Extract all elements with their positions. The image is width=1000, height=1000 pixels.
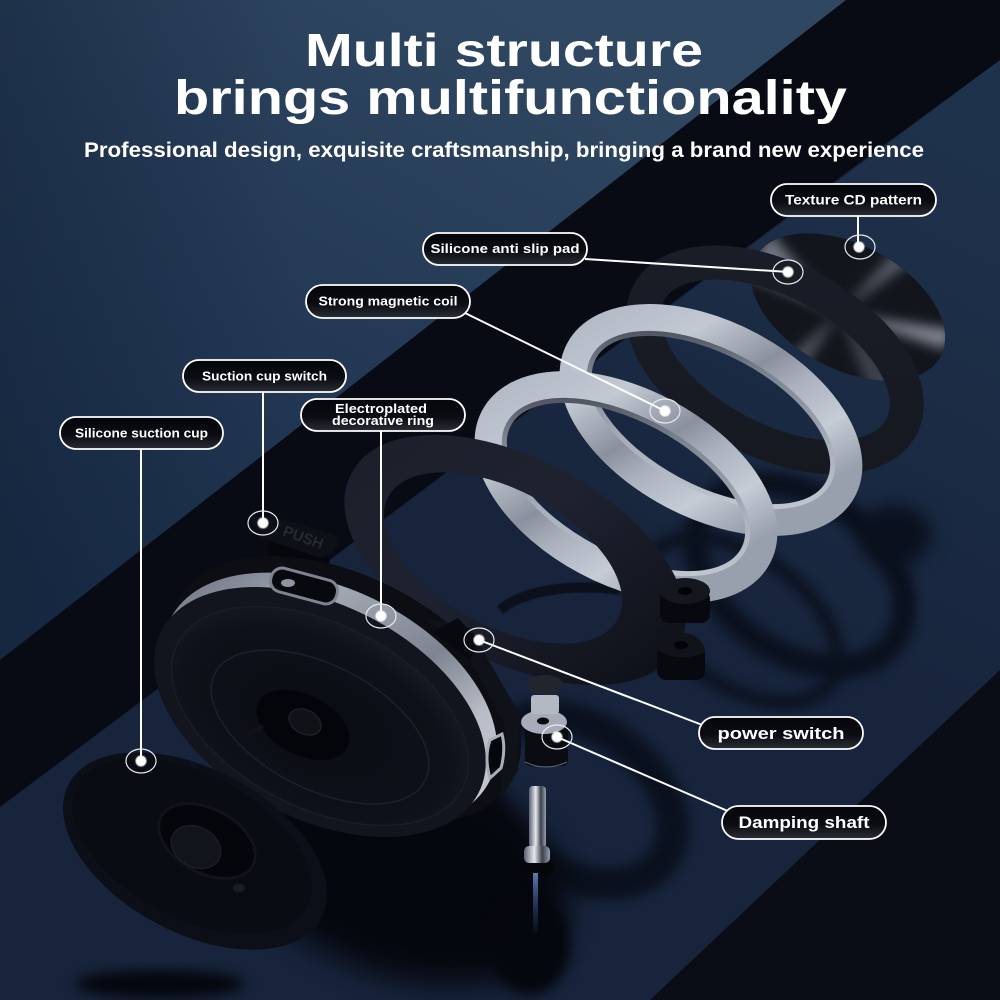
damping shaft pin	[520, 786, 554, 933]
label: Texture CD pattern	[771, 184, 936, 259]
subtitle: Professional design, exquisite craftsmanship, bringing a brand new experience	[84, 139, 924, 162]
label: Strong magnetic coil: Strong magnetic coil	[318, 294, 458, 308]
label: Suction cup switch	[183, 360, 346, 535]
hinge pivot	[657, 578, 710, 680]
label: Silicone anti slip pad: Silicone anti slip pad	[430, 241, 580, 256]
label: power switch	[464, 628, 863, 749]
suction cup switch: PUSH	[281, 523, 326, 553]
label: Silicone anti slip pad	[423, 233, 803, 284]
label: Damping shaft	[542, 725, 886, 839]
label: Electroplated decorative ring: Electroplated	[335, 402, 427, 416]
magnetic coil ring back	[540, 276, 882, 564]
soft ring shadows	[75, 445, 939, 1000]
magnetic coil ring front	[455, 343, 797, 631]
main magnetic body	[113, 501, 566, 888]
title	[174, 24, 847, 125]
label: Suction cup switch: Suction cup switch	[202, 368, 327, 384]
damping knob and washer	[521, 675, 568, 767]
title: Multi structure	[305, 24, 703, 76]
label: Electroplated decorative ring: decorative ring	[332, 414, 434, 428]
texture CD disc	[752, 233, 946, 380]
label: Silicone suction cup: Silicone suction cup	[75, 426, 208, 440]
label: Texture CD pattern: Texture CD pattern	[785, 192, 922, 208]
label: power switch: power switch	[718, 724, 844, 743]
label: Silicone suction cup	[60, 417, 223, 773]
label: Strong magnetic coil	[306, 285, 680, 423]
electroplated decorative black ring	[344, 435, 686, 685]
silicone suction cup	[30, 711, 360, 991]
silicone anti slip pad ring	[611, 222, 939, 498]
suction cup switch	[250, 516, 338, 578]
title: brings multifunctionality	[174, 72, 847, 125]
label: Damping shaft: Damping shaft	[738, 813, 870, 832]
label: Electroplated decorative ring	[301, 399, 465, 628]
